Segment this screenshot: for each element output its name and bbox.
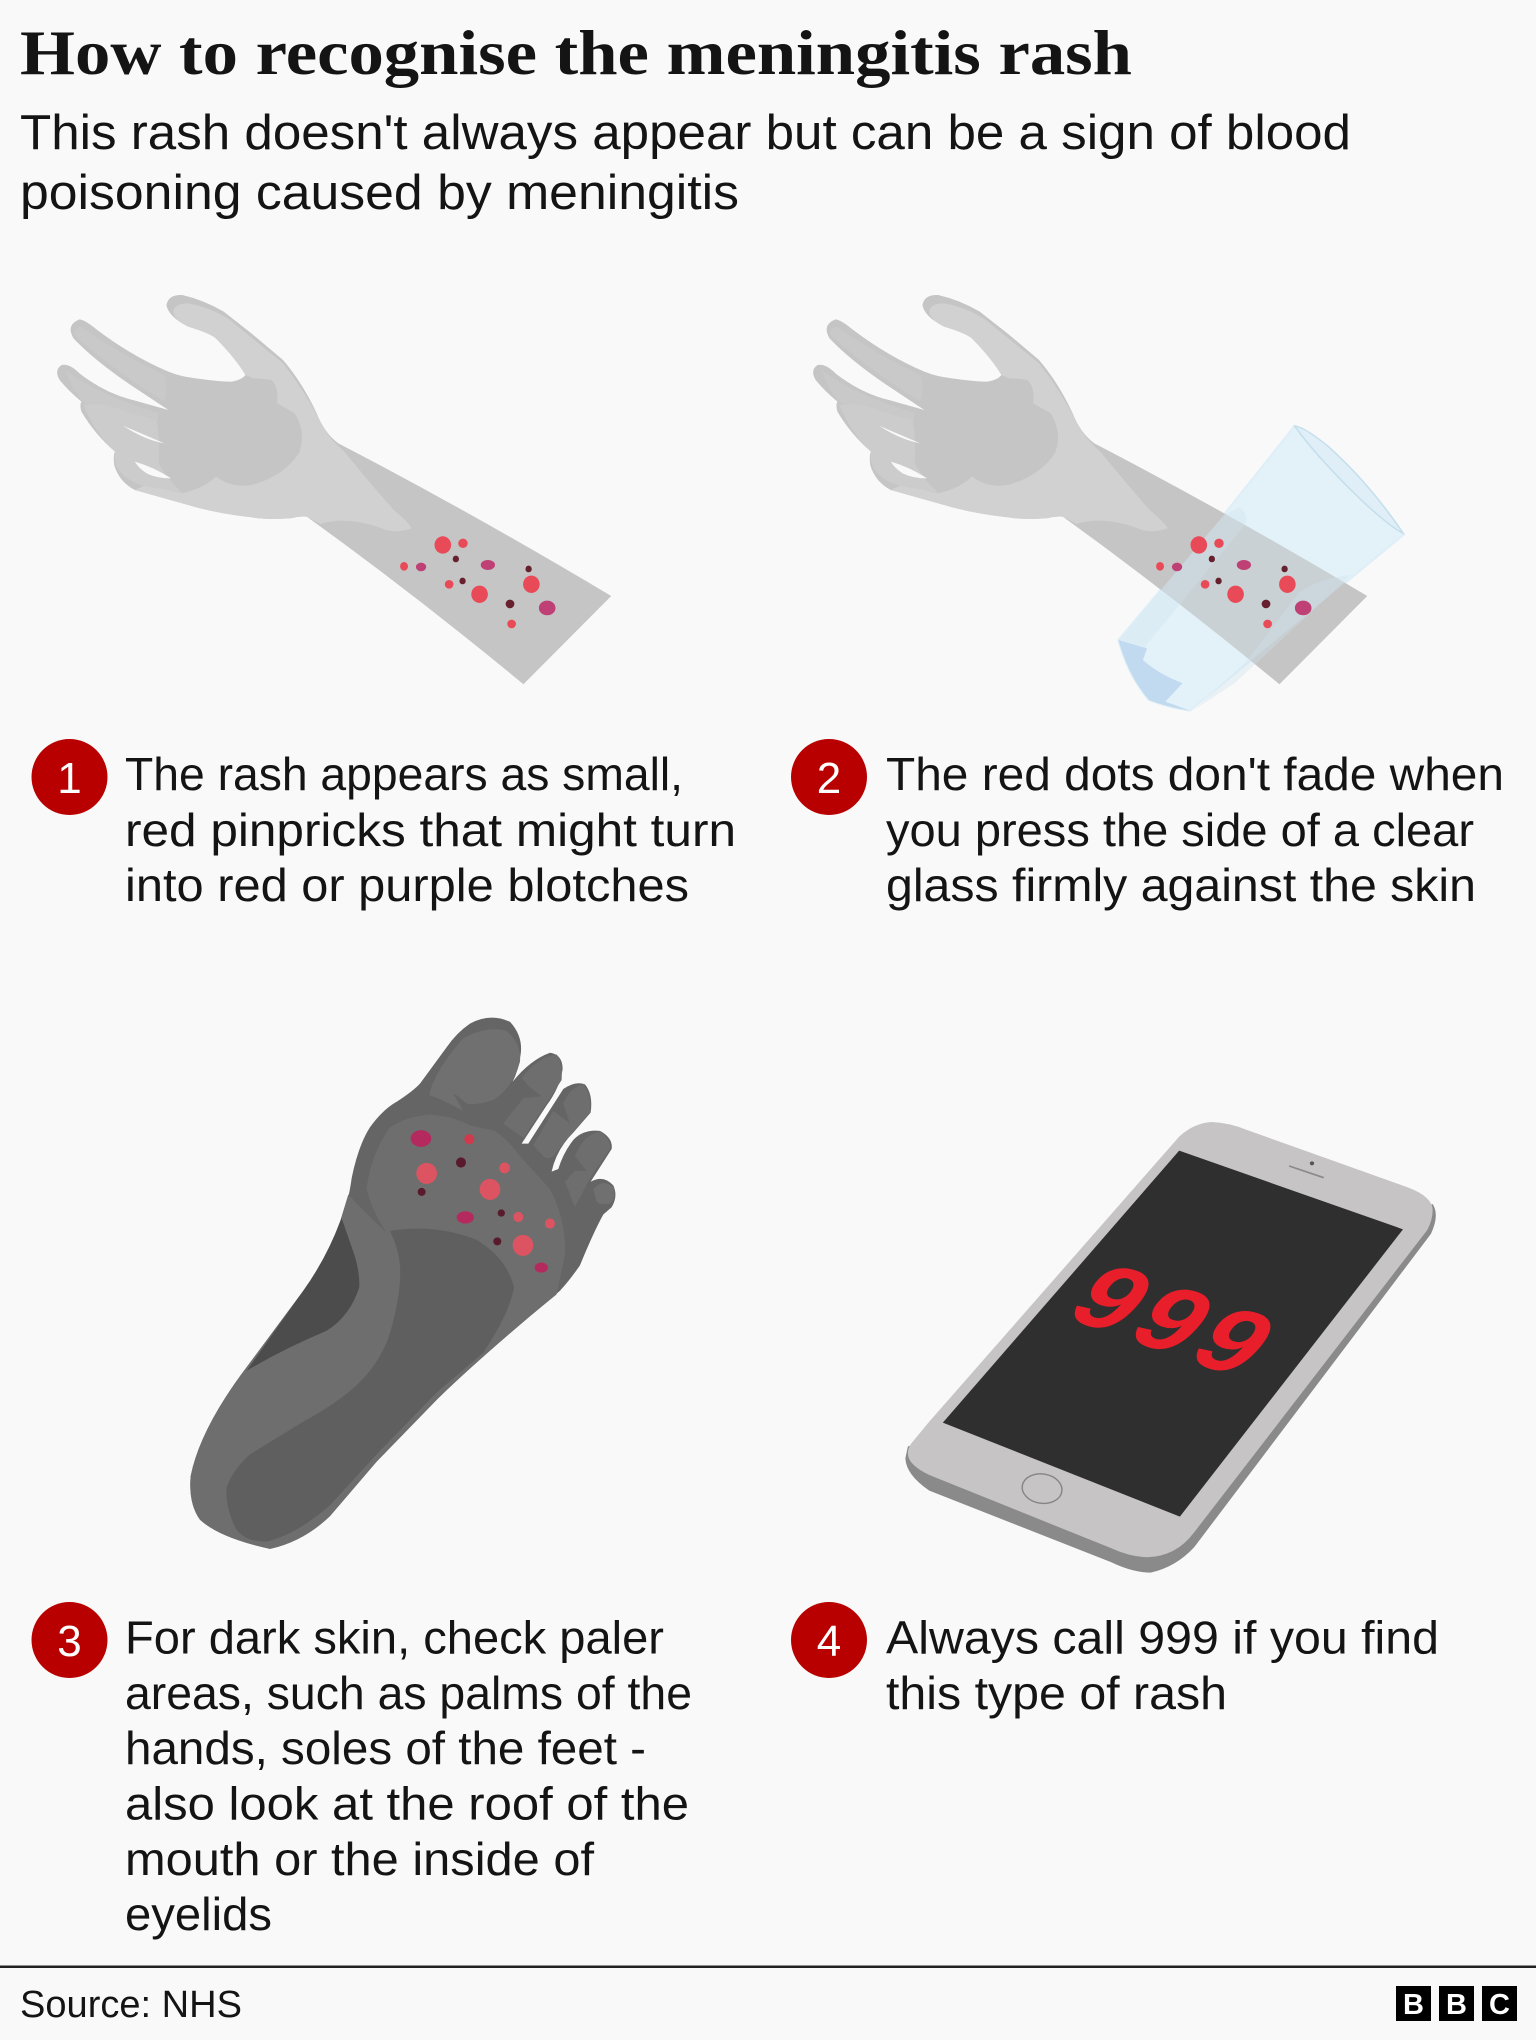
step 3: hands, soles of the feet - [125,1722,646,1774]
step 3 [32,1602,692,1940]
step 2: 2 [817,754,841,803]
step 3: mouth or the inside of [125,1833,594,1885]
subtitle: This rash doesn't always appear but can be a sign of blood [20,106,1351,160]
step 2: The red dots don't fade when [886,748,1504,800]
step 3: also look at the roof of the [125,1778,689,1830]
title: How to recognise the meningitis rash [20,17,1132,88]
step 4: this type of rash [886,1667,1227,1719]
step 3: 3 [57,1617,82,1666]
step 2 [791,739,1504,911]
step 2: glass firmly against the skin [886,859,1476,911]
illustration: arm with glass pressed on rash [813,295,1403,711]
step 2: you press the side of a clear [886,804,1474,856]
BBC logo: B [1446,1989,1467,2021]
subtitle [20,106,1351,220]
step 1: red pinpricks that might turn [125,804,736,856]
step 3: For dark skin, check paler [125,1612,664,1664]
step 3: areas, such as palms of the [125,1667,692,1719]
step 3: eyelids [125,1888,272,1940]
subtitle: poisoning caused by meningitis [20,166,739,220]
step 1: into red or purple blotches [125,859,689,911]
illustration: phone showing 999 [905,1122,1436,1573]
illustration: foot sole with rash [190,1018,615,1549]
BBC logo [1396,1986,1517,2021]
step 4: 4 [817,1617,841,1666]
illustration: arm with rash [57,295,611,684]
BBC logo: B [1403,1989,1424,2021]
source: Source: NHS [20,1984,242,2026]
step 4 [791,1602,1439,1719]
step 1 [32,739,736,911]
step 4: Always call 999 if you find [886,1612,1439,1664]
illustration: phone showing 999: 999 [1048,1245,1307,1397]
BBC logo: C [1489,1989,1510,2021]
step 1: The rash appears as small, [125,748,683,800]
step 1: 1 [57,754,82,803]
